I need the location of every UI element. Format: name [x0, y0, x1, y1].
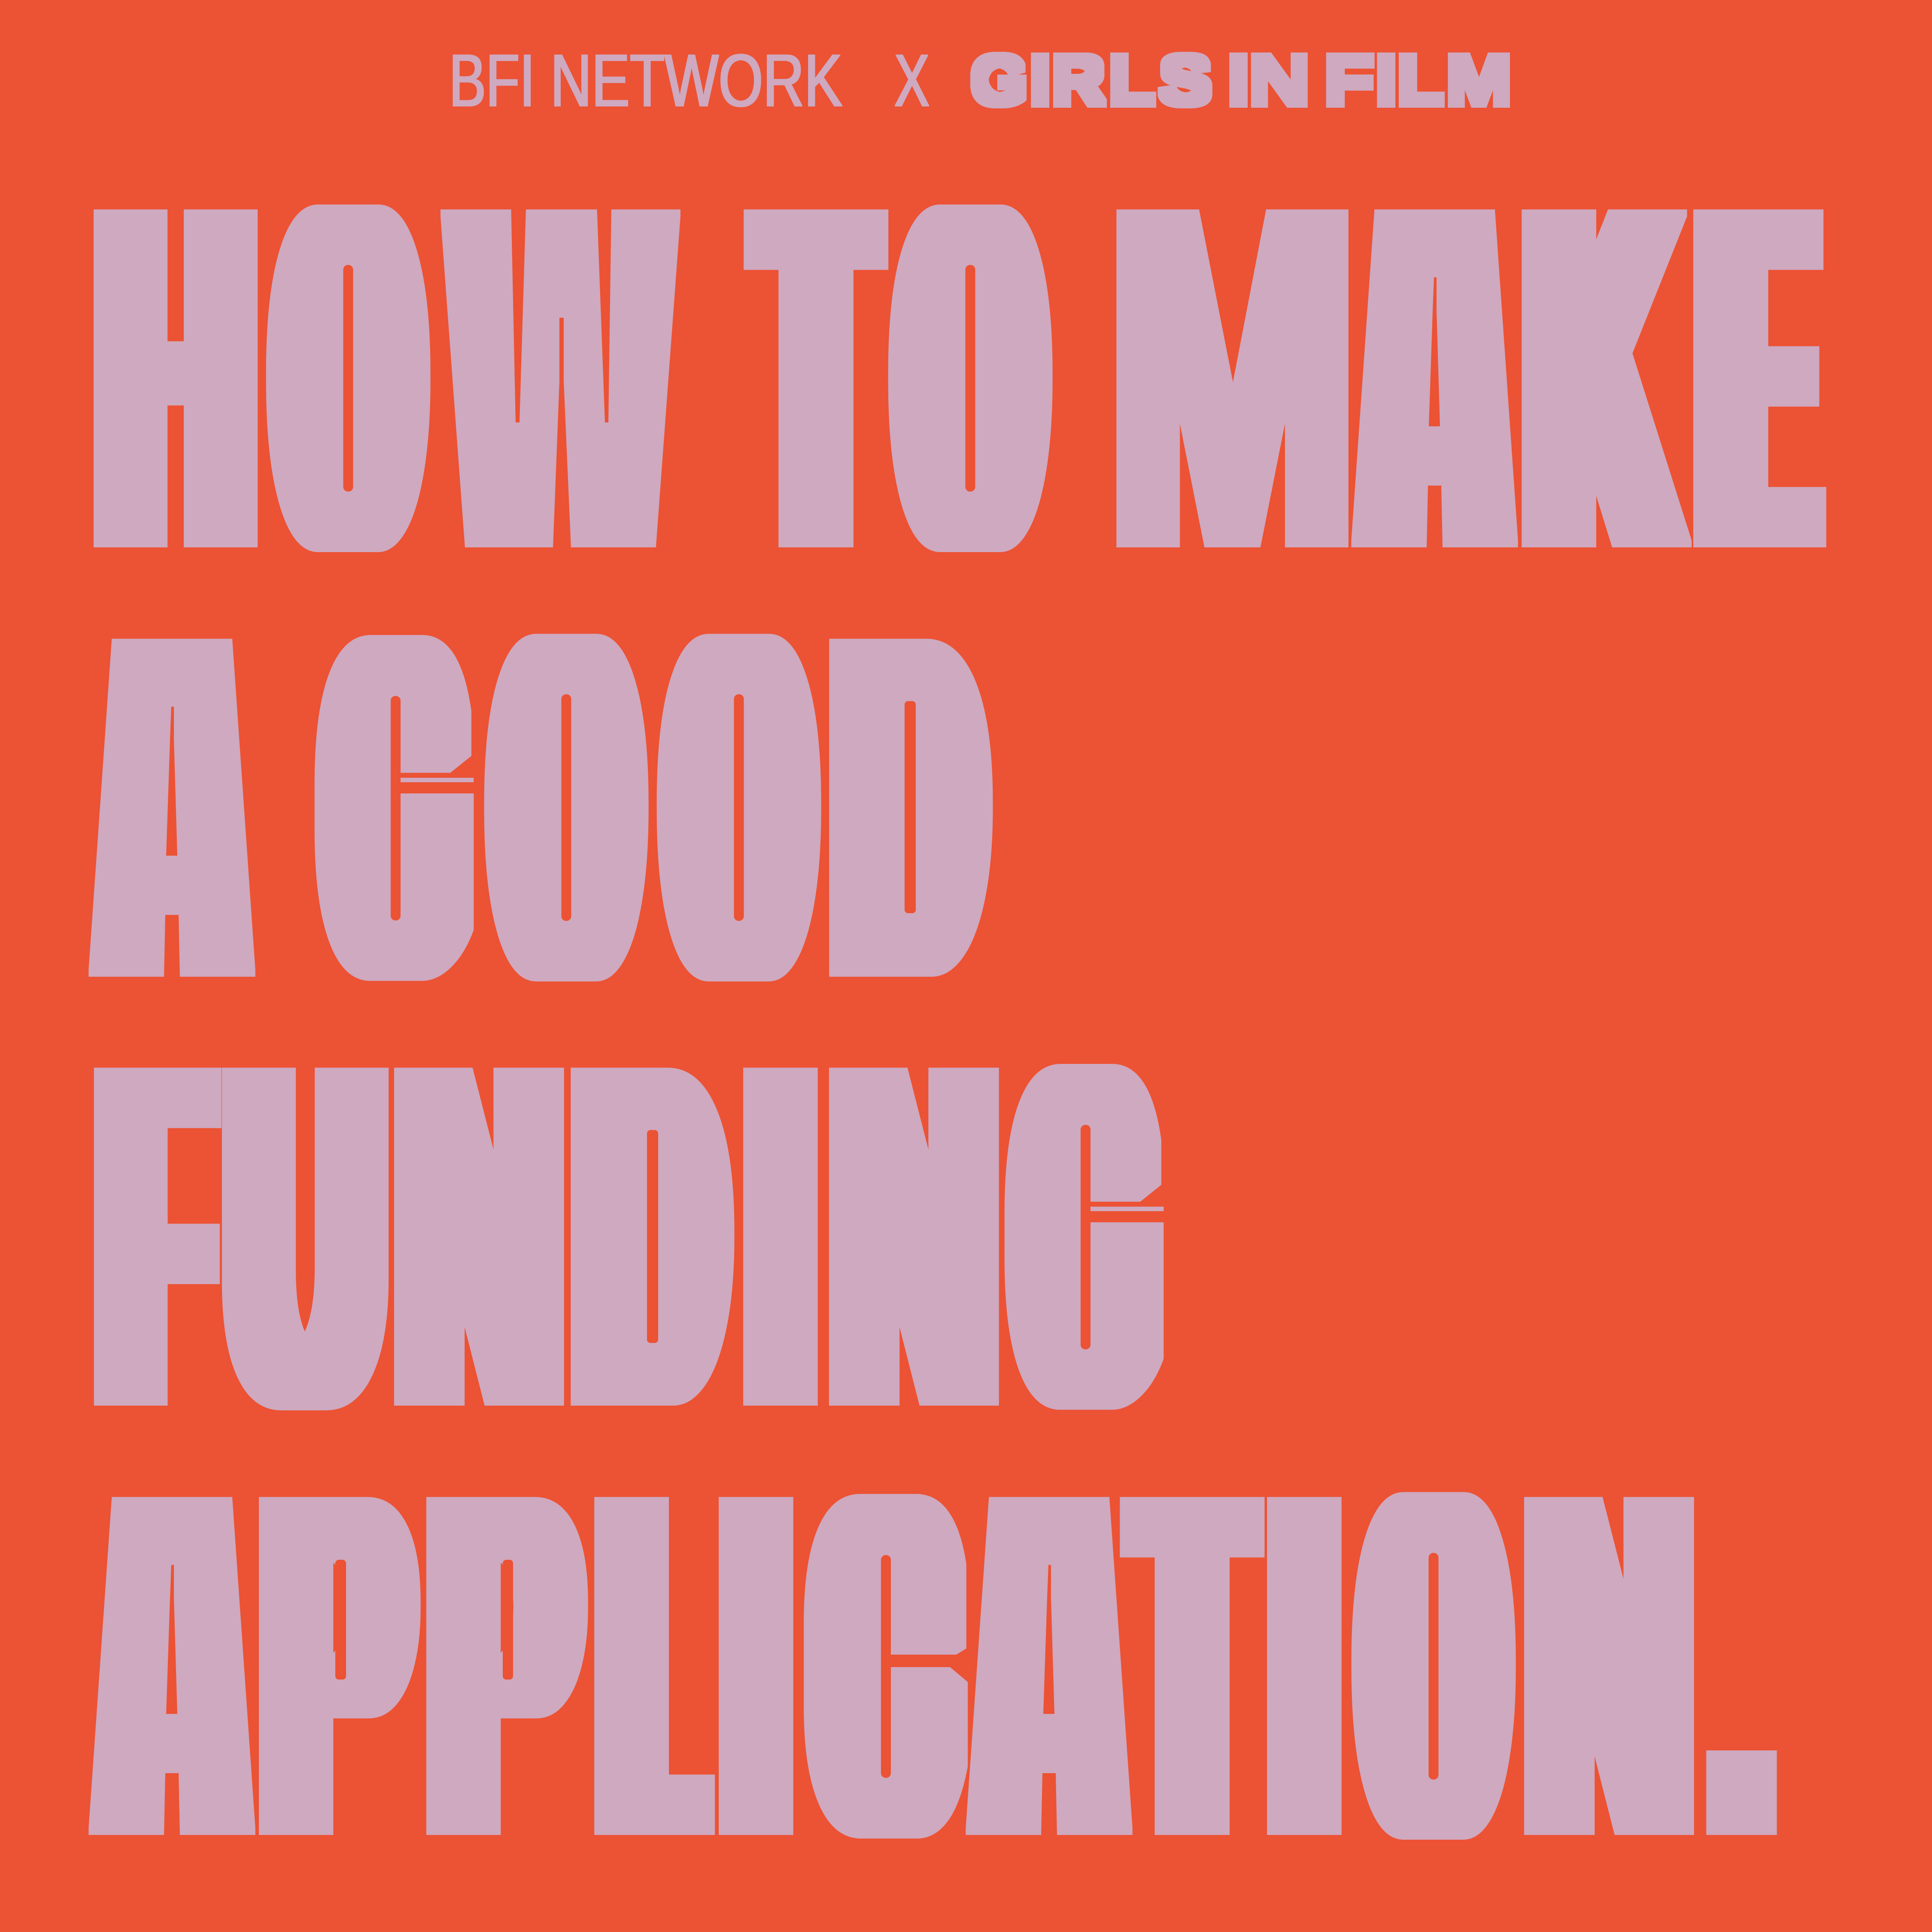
title line: APPLICATION.	[139, 1393, 1765, 1932]
logo: GIRLS IN FILM: N	[1248, 43, 1310, 118]
title line: HOW TO MAKE: O	[290, 108, 407, 646]
logo: GIRLS IN FILM: S	[1159, 43, 1212, 118]
title line: A GOOD: O	[680, 538, 797, 1075]
title line: HOW TO MAKE: H	[102, 109, 249, 646]
title line: APPLICATION.: O	[1375, 1396, 1492, 1932]
title line: APPLICATION.: P	[267, 1396, 405, 1932]
title line: HOW TO MAKE: E	[1711, 108, 1804, 646]
logo: GIRLS IN FILM: G	[971, 42, 1027, 118]
collaboration X: X	[894, 39, 930, 122]
title line: A GOOD: A	[139, 538, 205, 1076]
title line: APPLICATION.: L	[614, 1396, 690, 1932]
title line: FUNDING	[110, 966, 1169, 1505]
logo: GIRLS IN FILM	[971, 42, 1512, 118]
title line: A GOOD: O	[508, 538, 625, 1075]
title line: HOW TO MAKE: M	[1109, 109, 1355, 647]
title line: FUNDING: D	[584, 966, 716, 1504]
title line: A GOOD: G	[334, 570, 458, 1045]
logo: BFI NETWORK: BFI	[449, 39, 535, 122]
logo: GIRLS IN FILM: M	[1446, 43, 1512, 118]
logo: GIRLS IN FILM: L	[1397, 43, 1443, 118]
title line: APPLICATION.: C	[825, 1460, 945, 1871]
logo: GIRLS IN FILM: L	[1109, 43, 1154, 118]
logo: GIRLS IN FILM: I	[1229, 42, 1248, 118]
title line: HOW TO MAKE: W	[495, 108, 627, 646]
logo: GIRLS IN FILM: F	[1324, 43, 1374, 118]
logo: GIRLS IN FILM: I	[1377, 42, 1396, 118]
title line: HOW TO MAKE	[102, 108, 1804, 647]
logo: BFI NETWORK	[449, 39, 842, 122]
title line: APPLICATION.: I	[732, 1396, 780, 1932]
title line: HOW TO MAKE: K	[1533, 108, 1670, 646]
title line: FUNDING: N	[401, 967, 557, 1505]
title line: FUNDING: I	[756, 967, 804, 1504]
title line: APPLICATION.: A	[139, 1396, 205, 1932]
title line: FUNDING: F	[110, 966, 201, 1504]
logo: GIRLS IN FILM: I	[1031, 42, 1050, 118]
title line: APPLICATION.: .	[1718, 1393, 1765, 1931]
title line: FUNDING: G	[1024, 999, 1148, 1474]
title line: A GOOD	[139, 538, 975, 1076]
logo: GIRLS IN FILM: R	[1052, 42, 1105, 118]
title line: A GOOD: D	[843, 538, 975, 1075]
title line: FUNDING: U	[232, 967, 379, 1504]
title line: HOW TO MAKE: T	[768, 108, 864, 646]
title line: HOW TO MAKE: A	[1401, 109, 1468, 647]
title line: APPLICATION.: P	[435, 1396, 573, 1932]
title line: APPLICATION.: I	[1280, 1396, 1328, 1932]
title line: HOW TO MAKE: O	[912, 108, 1029, 646]
title line: APPLICATION.: T	[1144, 1396, 1240, 1932]
logo: BFI NETWORK: NETWORK	[550, 39, 842, 122]
header logos	[449, 39, 1512, 122]
title line: APPLICATION.: N	[1531, 1396, 1687, 1932]
title line: APPLICATION.: A	[1016, 1396, 1082, 1932]
title line: FUNDING: N	[836, 967, 992, 1505]
